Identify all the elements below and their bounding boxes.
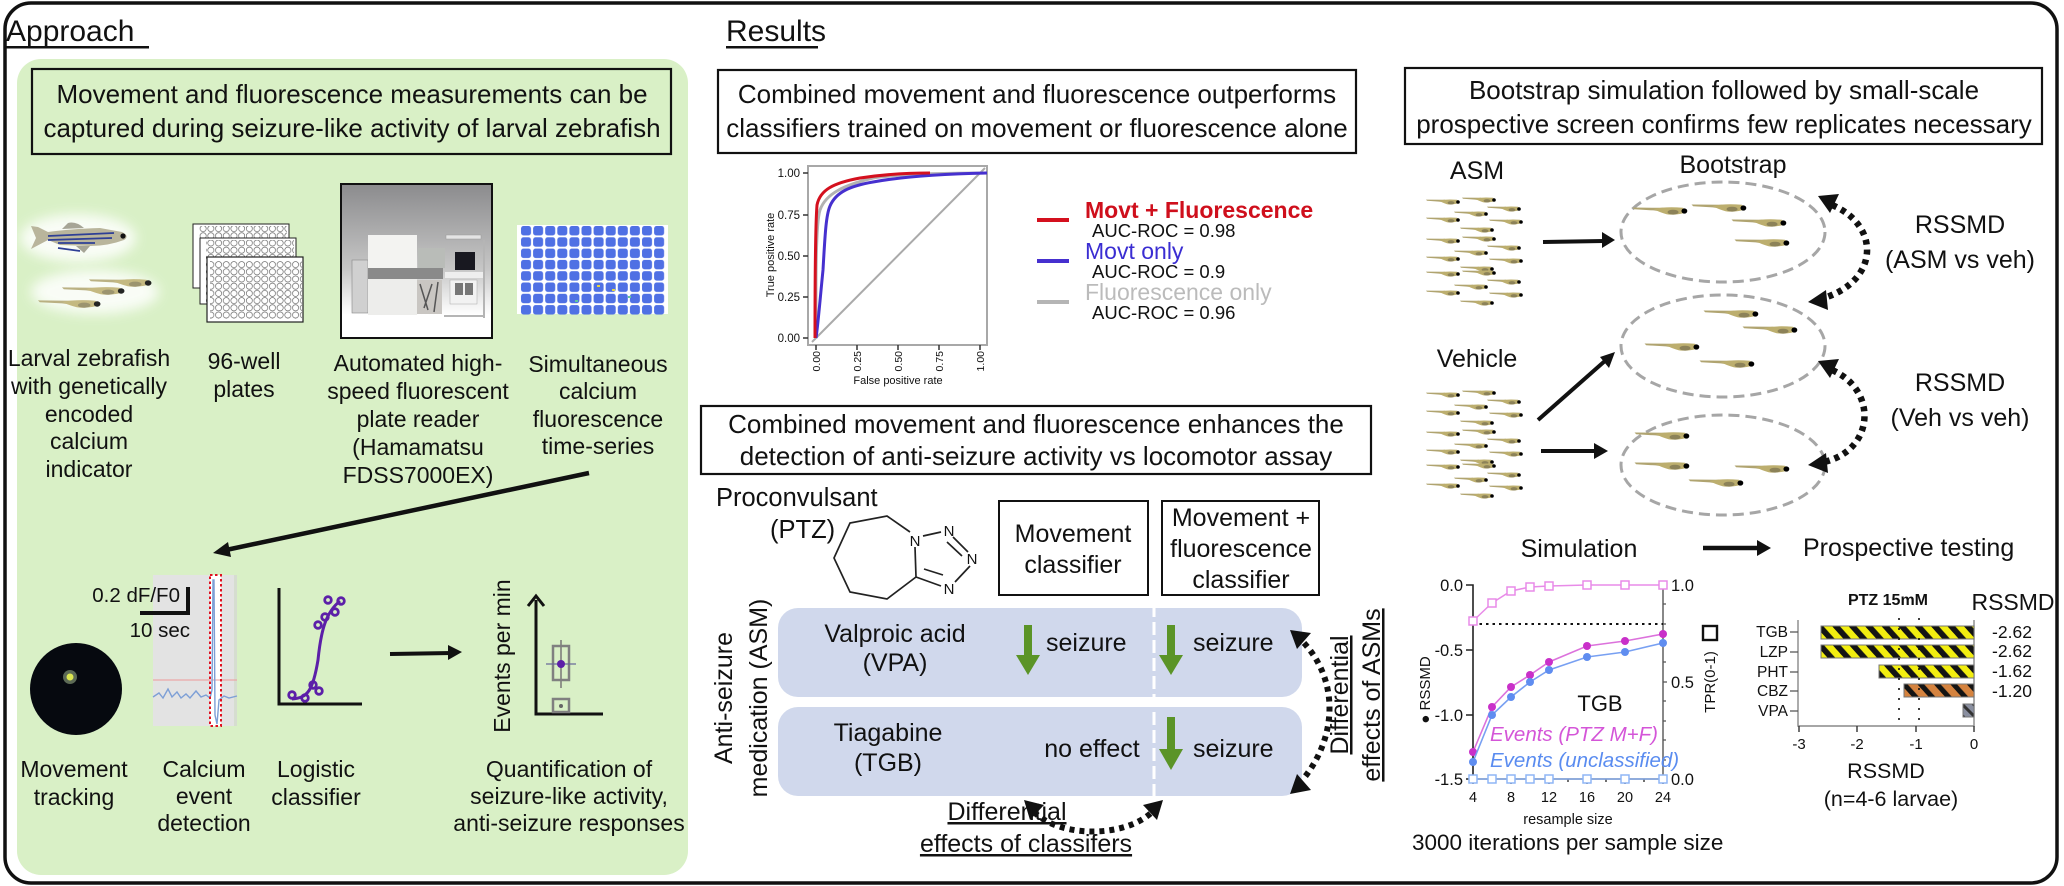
panel: tiagabine row bbox=[778, 707, 1302, 796]
chart: simulation resample curves: 0.5 bbox=[1671, 674, 1694, 692]
panel: tiagabine row: seizure bbox=[1193, 735, 1274, 763]
label: quantification: Quantification of bbox=[486, 756, 653, 782]
label: differential effects of classifiers: Differential bbox=[947, 798, 1067, 826]
label: calcium event detection: Calcium bbox=[162, 756, 246, 782]
label: anti-seizure medication (ASM) bbox=[710, 599, 773, 797]
chart: simulation resample curves: Events (unclassified) bbox=[1490, 749, 1679, 772]
ellipse: vehicle sample 1 bbox=[1621, 295, 1825, 397]
arrow: vehicle to bootstrap bbox=[1538, 352, 1615, 420]
chart: calcium trace bbox=[92, 575, 237, 726]
chart: ROC curve: 0.50 bbox=[893, 351, 905, 371]
label: time-series: time-series bbox=[542, 433, 654, 459]
scale bar: 10 sec bbox=[130, 619, 190, 642]
arrow: ASM to bootstrap bbox=[1543, 232, 1615, 248]
title box: anti-seizure detection: detection of anti-seizure activity vs locomotor assay bbox=[740, 441, 1332, 471]
chart: simulation resample curves: 0.0 bbox=[1440, 577, 1463, 595]
chart: ROC curve: 0.75 bbox=[778, 210, 800, 222]
label: differential effects of ASMs bbox=[1326, 608, 1386, 782]
series: TPR blue bbox=[1469, 775, 1667, 783]
chart: simulation resample curves bbox=[1417, 577, 1719, 828]
box: movement + fluorescence classifier: Movement + bbox=[1172, 504, 1310, 532]
RSSMD values: -1.20 bbox=[1992, 681, 2032, 701]
chart: prospective RSSMD bars: CBZ bbox=[1757, 683, 1788, 700]
icon: PTZ molecule: N bbox=[910, 533, 920, 550]
label: 96-well plates: plates bbox=[213, 376, 275, 402]
label: logistic classifier: classifier bbox=[271, 784, 361, 810]
label: Bootstrap: Bootstrap bbox=[1679, 151, 1787, 179]
scale bar: 0.2 dF/F0 bbox=[92, 584, 180, 607]
ellipse: vehicle sample 2 bbox=[1621, 415, 1825, 515]
RSSMD values bbox=[1971, 589, 2055, 701]
panel: tiagabine row: (TGB) bbox=[854, 749, 922, 777]
chart: simulation resample curves: 1.0 bbox=[1671, 577, 1694, 595]
chart: ROC curve: 0.25 bbox=[852, 351, 864, 371]
chart: prospective RSSMD bars: 0 bbox=[1970, 736, 1978, 753]
arrow: differential classifiers bbox=[1024, 800, 1163, 832]
label: quantification: seizure-like activity, bbox=[470, 783, 668, 809]
label: proconvulsant: (PTZ) bbox=[770, 516, 835, 544]
chart: prospective RSSMD bars: TGB bbox=[1756, 624, 1788, 641]
icon: calcium fluorescence well plate bbox=[517, 225, 668, 315]
icon: plate reader photo bbox=[341, 184, 492, 338]
icon: vehicle larvae group bbox=[1426, 390, 1523, 498]
chart: simulation resample curves: Events (PTZ M+F) bbox=[1490, 723, 1658, 746]
label: movement tracking: Movement bbox=[20, 756, 128, 782]
chart: ROC curve: 1.00 bbox=[778, 168, 800, 180]
label: RSSMD n larvae: RSSMD bbox=[1847, 759, 1925, 783]
panel: approach bbox=[8, 59, 688, 875]
label: plate reader: plate reader bbox=[357, 406, 480, 432]
panel: valproic acid row: Valproic acid bbox=[824, 620, 966, 648]
panel: tiagabine row: Tiagabine bbox=[834, 719, 942, 747]
label: Prospective testing: Prospective testing bbox=[1803, 534, 2014, 562]
legend: ROC: AUC-ROC = 0.9 bbox=[1092, 261, 1225, 282]
chart: simulation resample curves: 16 bbox=[1579, 790, 1595, 806]
legend: ROC bbox=[1037, 197, 1313, 323]
label: larval zebrafish: with genetically bbox=[10, 373, 167, 399]
label: differential effects of classifiers: effects of classifers bbox=[920, 830, 1132, 858]
label: larval zebrafish: calcium bbox=[50, 428, 128, 454]
label: time-series: fluorescence bbox=[533, 406, 663, 432]
box: movement classifier bbox=[999, 501, 1148, 595]
chart: ROC curve: 0.00 bbox=[811, 351, 823, 371]
chart: simulation resample curves: 12 bbox=[1541, 790, 1557, 806]
chart: events per min: Events per min bbox=[489, 579, 515, 733]
label: proconvulsant: Proconvulsant bbox=[716, 484, 878, 512]
icon: movement tracking well bbox=[30, 643, 122, 735]
panel: tiagabine row: no effect bbox=[1044, 735, 1140, 763]
arrow: seizure down (movement) bbox=[1016, 625, 1040, 675]
icon: PTZ molecule: N bbox=[967, 551, 977, 568]
legend: ROC: AUC-ROC = 0.98 bbox=[1092, 220, 1235, 241]
arrow: seizure down (tiagabine) bbox=[1159, 717, 1183, 770]
chart: prospective RSSMD bars: -1 bbox=[1909, 736, 1923, 753]
legend: ROC: Movt + Fluorescence bbox=[1085, 197, 1313, 223]
chart: simulation resample curves: TPR(0-1) bbox=[1702, 651, 1719, 713]
chart: ROC curve: 0.25 bbox=[778, 292, 800, 304]
scale bar bbox=[92, 584, 190, 642]
chart: simulation resample curves: 20 bbox=[1617, 790, 1633, 806]
arrow: simulation to prospective bbox=[1703, 540, 1771, 556]
chart: simulation resample curves: -1.0 bbox=[1435, 707, 1463, 725]
arrow: seizure down (combined) bbox=[1159, 625, 1183, 675]
icon: 96-well plates bbox=[193, 224, 303, 322]
title box: bootstrap: Bootstrap simulation followed by small-scale bbox=[1469, 75, 1979, 105]
label: calcium event detection: detection bbox=[157, 810, 251, 836]
label: plate reader: speed fluorescent bbox=[327, 378, 509, 404]
label: 96-well plates: 96-well bbox=[208, 348, 280, 374]
approach title box: captured during seizure-like activity of larval zebrafish bbox=[43, 113, 661, 143]
title box: anti-seizure detection: Combined movement and fluorescence enhances the bbox=[728, 409, 1344, 439]
chart: prospective RSSMD bars: VPA bbox=[1758, 703, 1789, 720]
label: plate reader: (Hamamatsu bbox=[352, 434, 484, 460]
label: RSSMD veh vs veh: RSSMD bbox=[1915, 369, 2005, 397]
title box: movement and fluorescence: Combined movement and fluorescence outperforms bbox=[738, 79, 1336, 109]
label: differential effects of ASMs: Differential bbox=[1326, 635, 1354, 755]
chart: prospective RSSMD bars bbox=[1756, 589, 2055, 753]
arrow: differential ASMs bbox=[1290, 630, 1330, 794]
chart: simulation resample curves: 8 bbox=[1507, 790, 1515, 806]
arrow: classifier to quantification bbox=[390, 645, 462, 660]
label: logistic classifier: Logistic bbox=[277, 756, 355, 782]
RSSMD values: -2.62 bbox=[1992, 641, 2032, 661]
label: RSSMD n larvae: (n=4-6 larvae) bbox=[1824, 787, 1958, 811]
title box: bootstrap: prospective screen confirms few replicates necessary bbox=[1416, 109, 2032, 139]
icon: zebrafish adult and larvae bbox=[20, 214, 159, 314]
label: differential effects of ASMs: effects of ASMs bbox=[1358, 608, 1386, 782]
icon: PTZ molecule: N bbox=[944, 523, 954, 540]
legend: ROC: AUC-ROC = 0.96 bbox=[1092, 302, 1235, 323]
chart: ROC curve: False positive rate bbox=[853, 375, 943, 387]
label: Simulation: Simulation bbox=[1521, 535, 1637, 563]
title box: movement and fluorescence: classifiers trained on movement or fluorescence alone bbox=[726, 113, 1348, 143]
box: movement classifier: Movement bbox=[1015, 520, 1131, 548]
chart: simulation resample curves: 0.0 bbox=[1671, 771, 1694, 789]
panel: valproic acid row: seizure bbox=[1046, 629, 1127, 657]
box: movement + fluorescence classifier: classifier bbox=[1192, 566, 1290, 594]
divider between classifier columns bbox=[1152, 604, 1156, 800]
approach title box bbox=[32, 69, 671, 154]
label: RSSMD ASM vs veh: RSSMD bbox=[1915, 211, 2005, 239]
label: time-series: calcium bbox=[559, 378, 637, 404]
arrow: to analysis bbox=[213, 473, 589, 557]
panel: valproic acid row: seizure bbox=[1193, 629, 1274, 657]
panel: valproic acid row: (VPA) bbox=[863, 649, 927, 677]
series: RSSMD magenta bbox=[1469, 630, 1667, 756]
heading: Results: Results bbox=[726, 15, 826, 48]
title box: bootstrap bbox=[1405, 68, 2042, 144]
label: RSSMD ASM vs veh: (ASM vs veh) bbox=[1885, 246, 2035, 274]
label: RSSMD veh vs veh: (Veh vs veh) bbox=[1891, 404, 2029, 432]
panel: valproic acid row bbox=[778, 608, 1302, 697]
RSSMD values: -2.62 bbox=[1992, 622, 2032, 642]
label: larval zebrafish: encoded bbox=[45, 401, 133, 427]
chart: prospective RSSMD bars: -2 bbox=[1850, 736, 1864, 753]
icon: ASM larvae group bbox=[1426, 197, 1523, 306]
label: larval zebrafish: indicator bbox=[46, 456, 133, 482]
label: calcium event detection: event bbox=[176, 783, 233, 809]
icon: PTZ molecule: N bbox=[944, 581, 954, 598]
label: time-series: Simultaneous bbox=[528, 351, 668, 377]
label: movement tracking: tracking bbox=[34, 784, 114, 810]
chart: ROC curve: True positive rate bbox=[765, 213, 777, 297]
ellipse: ASM sample bbox=[1621, 182, 1825, 282]
chart: simulation resample curves: resample size bbox=[1523, 812, 1613, 828]
chart: ROC curve bbox=[765, 166, 987, 387]
label: plate reader: FDSS7000EX) bbox=[343, 462, 493, 488]
box: movement + fluorescence classifier bbox=[1162, 501, 1319, 595]
label: anti-seizure medication (ASM): medication (ASM) bbox=[745, 599, 773, 797]
approach title box: Movement and fluorescence measurements can be bbox=[56, 79, 648, 109]
series: TPR magenta bbox=[1469, 581, 1667, 625]
label: larval zebrafish: Larval zebrafish bbox=[8, 345, 170, 371]
heading: Approach: Approach bbox=[6, 15, 134, 48]
title box: anti-seizure detection bbox=[701, 406, 1371, 474]
legend: ROC: Movt only bbox=[1085, 238, 1184, 264]
label: quantification: anti-seizure responses bbox=[453, 810, 685, 836]
box: movement + fluorescence classifier: fluorescence bbox=[1170, 535, 1312, 563]
label: ASM: ASM bbox=[1450, 157, 1504, 185]
chart: simulation resample curves: ● RSSMD bbox=[1417, 656, 1434, 724]
chart: prospective RSSMD bars: -3 bbox=[1792, 736, 1806, 753]
box: movement classifier: classifier bbox=[1024, 551, 1122, 579]
chart: ROC curve: 0.00 bbox=[778, 333, 800, 345]
chart: prospective RSSMD bars: LZP bbox=[1760, 644, 1788, 661]
arrow: RSSMD veh vs veh bbox=[1808, 359, 1864, 473]
chart: simulation resample curves: -1.5 bbox=[1435, 771, 1463, 789]
series: RSSMD blue bbox=[1469, 639, 1667, 766]
label: plate reader: Automated high- bbox=[334, 350, 502, 376]
arrow: vehicle to bootstrap lower bbox=[1541, 443, 1608, 459]
chart: simulation resample curves: 24 bbox=[1655, 790, 1671, 806]
chart: ROC curve: 0.75 bbox=[934, 351, 946, 371]
title box: movement and fluorescence bbox=[718, 70, 1356, 153]
legend: ROC: Fluorescence only bbox=[1085, 279, 1272, 305]
label: anti-seizure medication (ASM): Anti-seizure bbox=[710, 632, 738, 764]
icon: PTZ molecule bbox=[834, 516, 977, 599]
chart: logistic classifier bbox=[279, 588, 362, 704]
chart: simulation resample curves: 4 bbox=[1469, 790, 1477, 806]
chart: simulation resample curves: -0.5 bbox=[1435, 642, 1463, 660]
chart: ROC curve: 1.00 bbox=[975, 351, 987, 371]
chart: events per min bbox=[489, 579, 603, 733]
RSSMD values: -1.62 bbox=[1992, 661, 2032, 681]
RSSMD values: RSSMD bbox=[1971, 589, 2055, 615]
chart: prospective RSSMD bars: PTZ 15mM bbox=[1848, 592, 1928, 609]
label: differential effects of classifiers bbox=[920, 798, 1132, 858]
chart: prospective RSSMD bars: PHT bbox=[1757, 664, 1789, 681]
label: Vehicle: Vehicle bbox=[1437, 345, 1517, 373]
chart: ROC curve: 0.50 bbox=[778, 251, 800, 263]
chart: simulation resample curves: TGB bbox=[1577, 691, 1623, 716]
arrow: RSSMD ASM vs veh bbox=[1808, 194, 1867, 310]
label: RSSMD n larvae bbox=[1824, 759, 1958, 811]
label: iterations: 3000 iterations per sample size bbox=[1412, 830, 1723, 855]
